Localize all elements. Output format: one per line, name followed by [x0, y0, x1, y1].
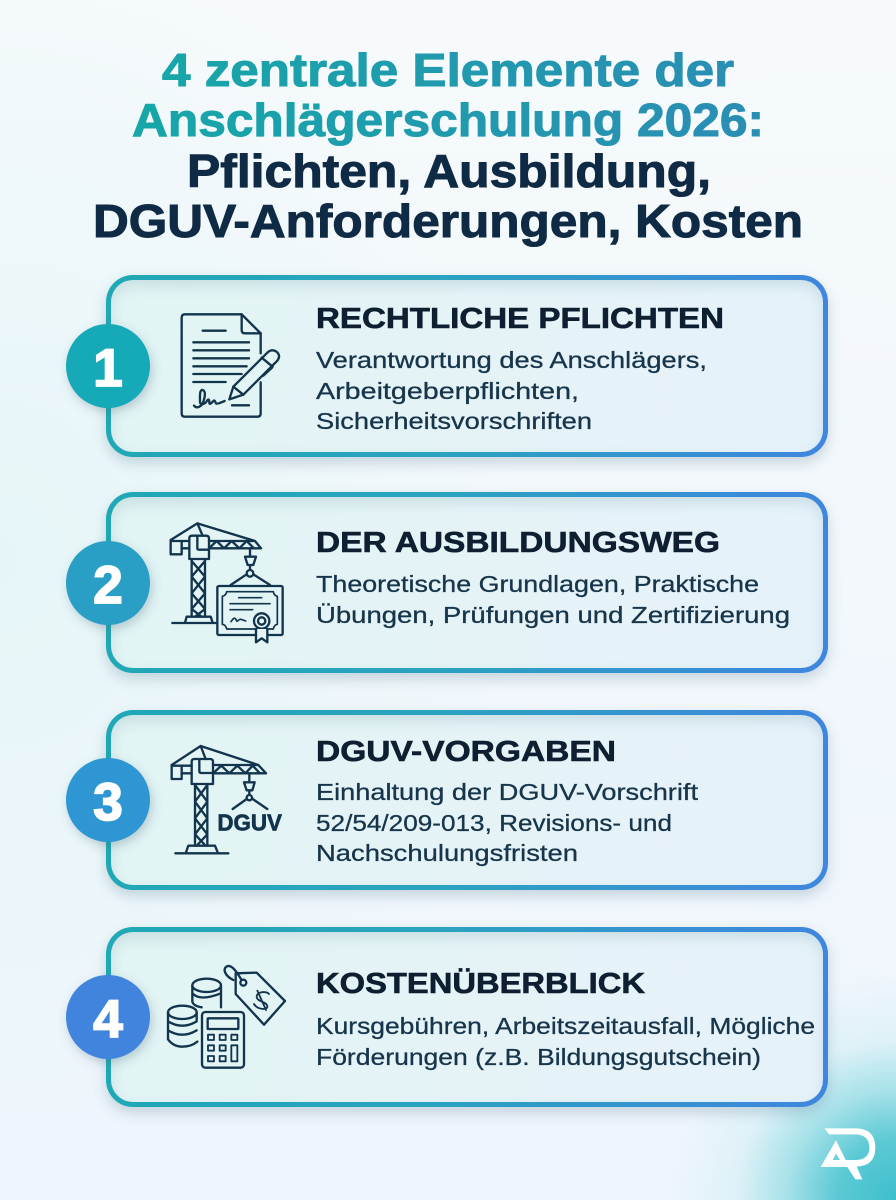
description — [316, 347, 707, 434]
heading: KOSTENÜBERBLICK — [316, 967, 645, 1000]
panel: der Ausbildungsweg — [63, 492, 834, 684]
description: 52/54/209-013, Revisions- und — [316, 810, 672, 836]
description: Arbeitgeberpflichten, — [316, 378, 579, 404]
number badge 1: 1 — [93, 339, 123, 398]
logo — [820, 1128, 876, 1180]
number badge 4: 4 — [93, 990, 123, 1049]
description — [316, 571, 790, 628]
description: Kursgebühren, Arbeitszeitausfall, Mögliche — [316, 1013, 815, 1039]
number badge 4 — [66, 975, 150, 1059]
description: Verantwortung des Anschlägers, — [316, 347, 707, 373]
description: Einhaltung der DGUV-Vorschrift — [316, 779, 699, 805]
number badge 3: 3 — [93, 773, 123, 832]
description: Theoretische Grundlagen, Praktische — [316, 571, 759, 597]
title — [93, 44, 803, 247]
title: DGUV-Anforderungen, Kosten — [93, 195, 803, 247]
title: Anschlägerschulung 2026: — [132, 94, 764, 146]
icon: crane with certificate — [171, 523, 283, 642]
number badge 1 — [66, 324, 150, 408]
description — [316, 1013, 815, 1070]
heading: DGUV-VORGABEN — [316, 736, 616, 768]
title: Pflichten, Ausbildung, — [187, 145, 711, 197]
number badge 2: 2 — [93, 556, 123, 615]
title: 4 zentrale Elemente der — [162, 44, 734, 96]
icon: crane with DGUV: DGUV — [217, 809, 282, 835]
description: Sicherheitsvorschriften — [316, 408, 592, 434]
panel: DGUV-Vorgaben — [63, 710, 834, 902]
number badge 2 — [66, 541, 150, 625]
panel: rechtliche Pflichten — [63, 275, 834, 468]
heading: DER AUSBILDUNGSWEG — [316, 527, 720, 559]
description: Nachschulungsfristen — [316, 840, 578, 866]
description: Übungen, Prüfungen und Zertifizierung — [316, 602, 790, 628]
icon: crane with DGUV — [172, 746, 282, 853]
icon: coins, calculator and price tag — [168, 966, 285, 1068]
panel: Kostenüberblick — [63, 927, 834, 1118]
heading: RECHTLICHE PFLICHTEN — [316, 303, 724, 335]
number badge 3 — [66, 758, 150, 842]
description — [316, 779, 699, 866]
icon: document with pen — [182, 314, 279, 417]
description: Förderungen (z.B. Bildungsgutschein) — [316, 1044, 761, 1070]
